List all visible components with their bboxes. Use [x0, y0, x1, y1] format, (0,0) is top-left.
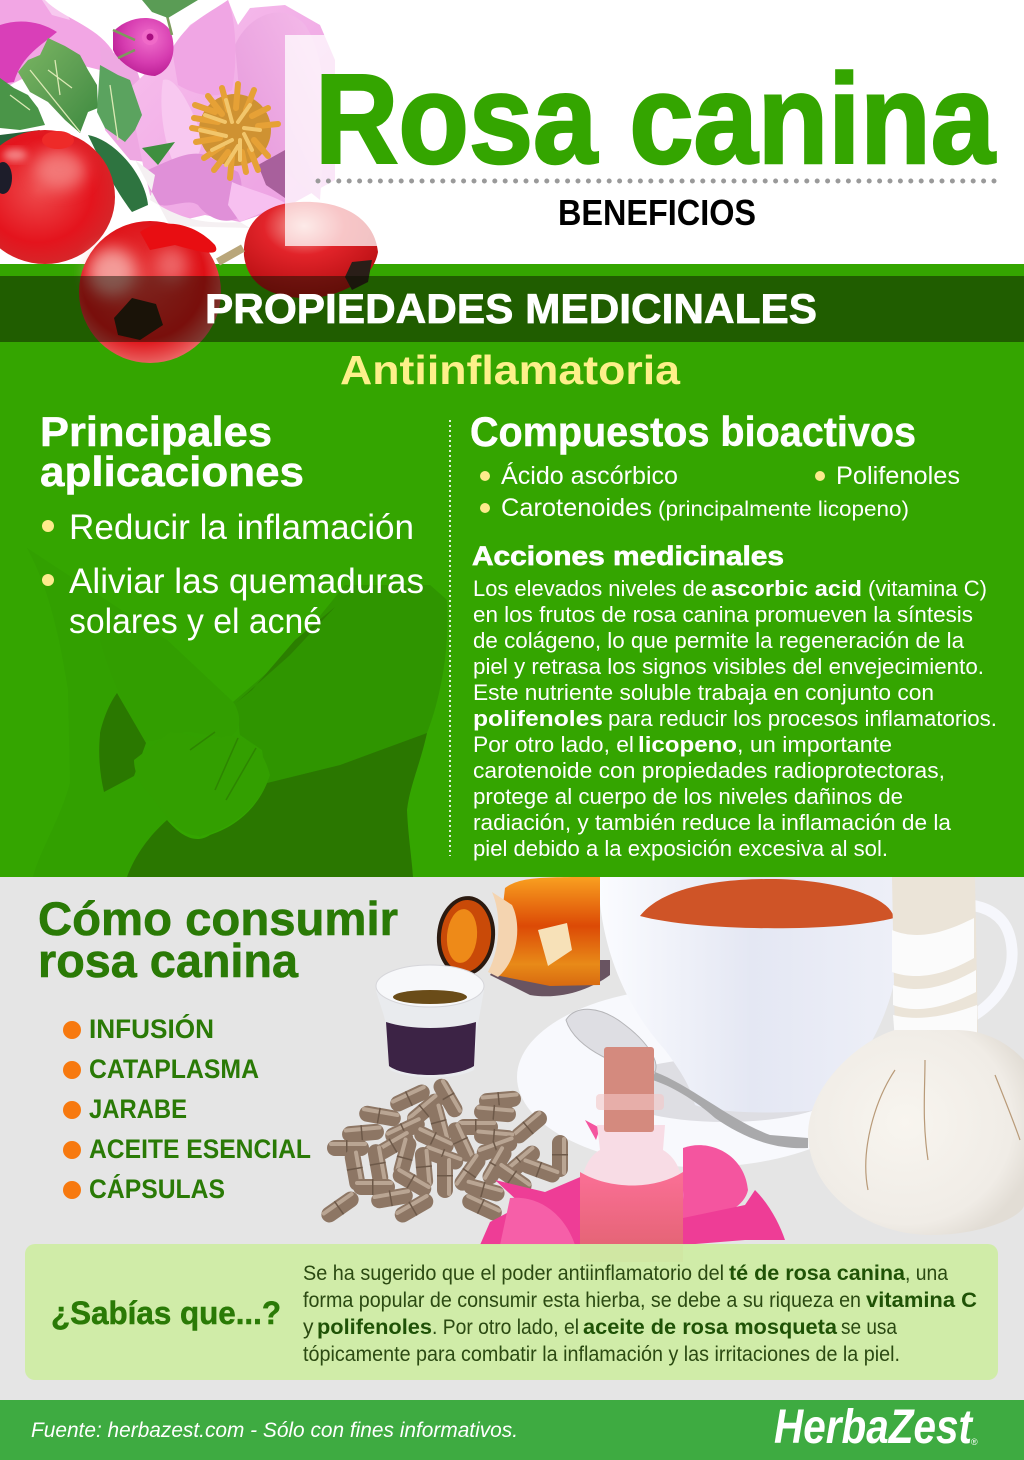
- illustration: medicine cup: [376, 965, 484, 1078]
- header translucent panel: [285, 35, 1024, 246]
- illustration: rose flowers and leaves: [0, 0, 335, 228]
- callout text: tópicamente para combatir la inflamación y las irritaciones de la piel.: [303, 1343, 900, 1366]
- list item 2: Aliviar las quemaduras: [69, 562, 424, 601]
- fruit left: [0, 130, 115, 264]
- dotted divider under title: [318, 178, 996, 184]
- illustration: oil vial: [580, 1047, 683, 1262]
- compound: carotenoides: Carotenoides: [501, 494, 652, 522]
- paragraph: acciones medicinales: , un importante: [737, 732, 892, 757]
- left flower: [0, 0, 116, 90]
- item: infusion: INFUSIÓN: [89, 1013, 214, 1044]
- item: cataplasma: CATAPLASMA: [89, 1054, 259, 1084]
- heading: [40, 408, 304, 495]
- illustration: rose hip fruits: [0, 130, 378, 363]
- illustration: spoon: [566, 1009, 808, 1148]
- callout text: aceite de rosa mosqueta: [583, 1316, 837, 1339]
- fruit center: [79, 221, 221, 363]
- list item 1: Reducir la inflamación: [69, 508, 414, 547]
- compound: polifenoles: Polifenoles: [836, 462, 960, 490]
- paragraph: acciones medicinales: carotenoide con propiedades radioprotectoras,: [473, 758, 945, 783]
- heading: aplicaciones: [40, 448, 304, 495]
- heading: Principales: [40, 408, 272, 455]
- paragraph: acciones medicinales: licopeno: [638, 732, 737, 757]
- illustration: cup: [598, 877, 1012, 1112]
- item: aceite esencial: ACEITE ESENCIAL: [89, 1134, 311, 1164]
- illustration: capsules: [318, 1076, 568, 1226]
- callout text: té de rosa canina: [729, 1262, 905, 1285]
- heading: como consumir: [38, 892, 398, 987]
- paragraph: acciones medicinales: ascorbic acid: [711, 576, 862, 601]
- callout heading: ¿Sabías que...?: [51, 1295, 281, 1331]
- heading: como consumir: Cómo consumir: [38, 892, 398, 945]
- callout text: , una: [905, 1262, 948, 1285]
- subheading: Acciones medicinales: [472, 541, 784, 571]
- callout text: . Por otro lado, el: [432, 1316, 579, 1339]
- illustration: arm silhouette: [27, 548, 448, 877]
- illustration: rose petals: [480, 1120, 785, 1245]
- item: jarabe: JARABE: [89, 1094, 187, 1124]
- paragraph: acciones medicinales: Los elevados niveles de: [473, 576, 707, 601]
- callout text: forma popular de consumir esta hierba, se debe a su riqueza en: [303, 1289, 861, 1312]
- paragraph: acciones medicinales: para reducir los procesos inflamatorios.: [608, 706, 997, 731]
- stem between fruits: [218, 248, 243, 262]
- heading: como consumir: rosa canina: [38, 934, 299, 987]
- panel: compuestos bioactivos: [470, 408, 997, 861]
- property heading: Antiinflamatoria: [340, 347, 681, 393]
- paragraph: acciones medicinales: [473, 576, 997, 861]
- paragraph: acciones medicinales: piel y retrasa los signos visibles del envejecimiento.: [473, 654, 984, 679]
- source note: Fuente: herbazest.com - Sólo con fines informativos.: [31, 1419, 518, 1442]
- logo: HerbaZest: ®: [971, 1437, 978, 1447]
- subtitle: BENEFICIOS: [558, 192, 756, 233]
- main flower petals: [128, 0, 335, 222]
- paragraph: acciones medicinales: radiación, y también reduce la inflamación de la: [473, 810, 952, 835]
- callout text: polifenoles: [317, 1316, 432, 1339]
- section banner: [0, 276, 1024, 342]
- paragraph: acciones medicinales: en los frutos de rosa canina promueven la síntesis: [473, 602, 973, 627]
- compound: acido ascorbico: Ácido ascórbico: [501, 461, 678, 490]
- callout text: y: [303, 1316, 314, 1339]
- callout text: Se ha sugerido que el poder antiinflamatorio del: [303, 1262, 724, 1285]
- compound: carotenoides: [480, 494, 909, 522]
- callout: sabias que: [25, 1244, 998, 1380]
- callout text: [303, 1262, 977, 1366]
- panel: como consumir illustrations: [318, 877, 1024, 1262]
- item: capsulas: CÁPSULAS: [89, 1173, 225, 1204]
- bud: [113, 18, 174, 76]
- heading: Compuestos bioactivos: [470, 408, 916, 455]
- list: forms of consumption: [63, 1013, 311, 1204]
- section banner: PROPIEDADES MEDICINALES: [205, 285, 817, 332]
- callout text: vitamina C: [866, 1289, 977, 1312]
- illustration: syrup bottle: [436, 877, 610, 996]
- leaves: [18, 38, 98, 133]
- footer: [0, 1400, 1024, 1460]
- paragraph: acciones medicinales: Por otro lado, el: [473, 732, 634, 757]
- fruit right: [244, 202, 378, 298]
- list item 2: [42, 562, 424, 641]
- paragraph: acciones medicinales: polifenoles: [473, 706, 603, 731]
- panel: principales aplicaciones: [40, 408, 424, 641]
- illustration: saucer: [517, 987, 883, 1167]
- paragraph: acciones medicinales: (vitamina C): [868, 576, 987, 601]
- logo: HerbaZest: HerbaZest: [774, 1401, 974, 1454]
- compound: carotenoides: (principalmente licopeno): [658, 498, 909, 521]
- paragraph: acciones medicinales: protege al cuerpo de los niveles dañinos de: [473, 784, 903, 809]
- paragraph: acciones medicinales: Este nutriente soluble trabaja en conjunto con: [473, 680, 934, 705]
- paragraph: acciones medicinales: de colágeno, lo que permite la regeneración de la: [473, 628, 965, 653]
- list item 2: solares y el acné: [69, 602, 322, 641]
- paragraph: acciones medicinales: piel debido a la exposición excesiva al sol.: [473, 836, 888, 861]
- callout text: se usa: [841, 1316, 897, 1339]
- illustration: herbal pouch: [808, 877, 1024, 1235]
- stamens: [192, 84, 278, 178]
